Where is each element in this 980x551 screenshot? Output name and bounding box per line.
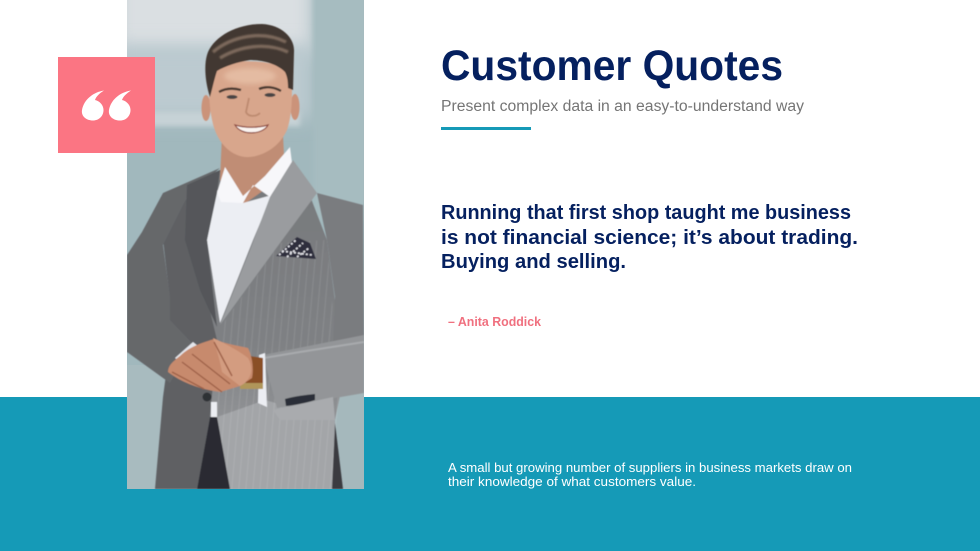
right shoulder and upper arm xyxy=(317,193,364,345)
mouth xyxy=(235,125,268,133)
trousers xyxy=(197,417,230,489)
photo: smiling man in grey suit xyxy=(115,0,368,489)
lower light jacket panel xyxy=(217,400,335,468)
clasped hands xyxy=(168,338,253,392)
hair xyxy=(205,24,294,97)
shirt lower strip xyxy=(211,402,217,417)
quote text: Buying and selling. xyxy=(441,250,626,273)
left shoulder and sleeve xyxy=(127,168,220,383)
shirt collar xyxy=(217,147,292,203)
right sleeve xyxy=(263,335,364,408)
neck xyxy=(220,135,285,205)
pink quote square xyxy=(58,57,155,153)
pocket flap xyxy=(289,397,335,420)
nose xyxy=(246,98,260,116)
quote text xyxy=(441,201,858,273)
shirt xyxy=(207,190,272,323)
photo background xyxy=(115,0,368,489)
pocket square xyxy=(276,237,316,259)
head xyxy=(202,24,300,157)
attribution: – Anita Roddick xyxy=(448,315,541,329)
quote text: is not financial science; it’s about trading. xyxy=(441,226,858,249)
ears xyxy=(202,95,210,121)
band description xyxy=(448,460,852,489)
icon: quotation mark xyxy=(82,90,131,120)
jacket button xyxy=(202,392,212,402)
eyes xyxy=(226,95,238,99)
band description: A small but growing number of suppliers in business markets draw on xyxy=(448,460,852,475)
right shirt cuff xyxy=(258,353,267,407)
teal band xyxy=(0,397,980,551)
left lapel xyxy=(185,170,220,327)
sleeve buttons xyxy=(285,394,315,406)
forehead highlight xyxy=(224,68,276,84)
subtitle: Present complex data in an easy-to-understand way xyxy=(441,98,804,115)
title: Customer Quotes xyxy=(441,42,783,90)
face xyxy=(209,61,292,157)
watch xyxy=(245,356,263,386)
quote text: Running that first shop taught me business xyxy=(441,201,851,224)
pinstripes xyxy=(280,242,336,427)
right lapel xyxy=(220,160,317,325)
band description: their knowledge of what customers value. xyxy=(448,474,696,489)
man figure xyxy=(127,24,364,489)
dark left jacket panel xyxy=(155,197,217,489)
accent rule xyxy=(441,127,531,130)
left sleeve cuff xyxy=(175,342,198,362)
eyebrows xyxy=(219,87,281,92)
jacket torso xyxy=(207,170,340,418)
